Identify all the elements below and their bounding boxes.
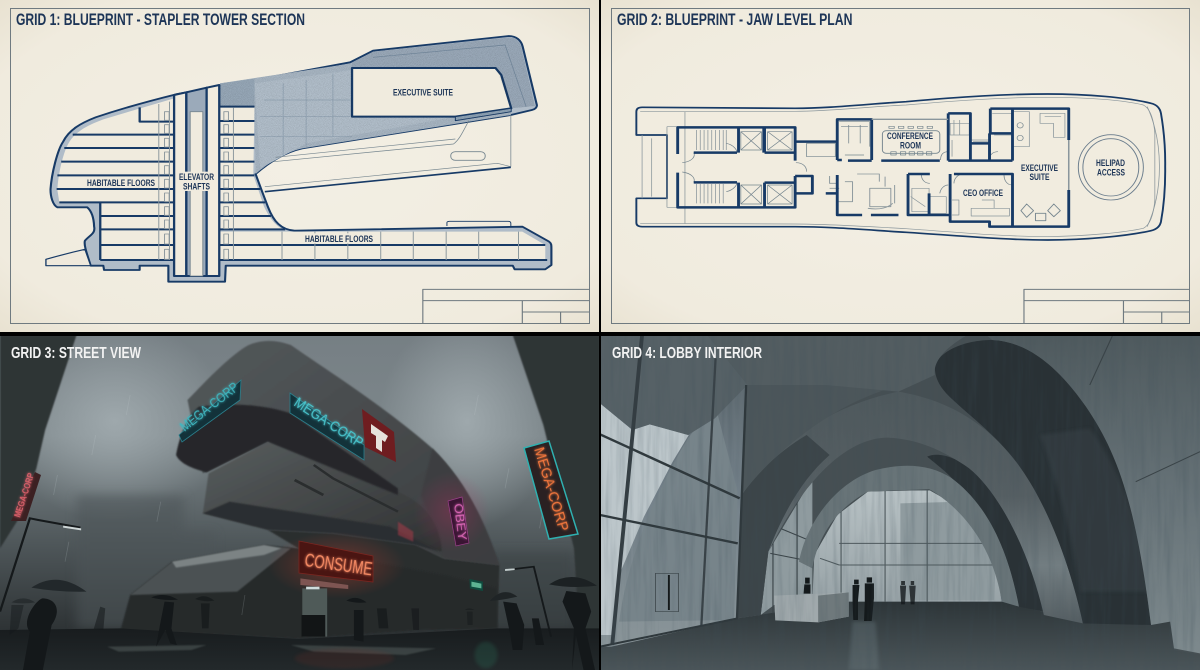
title block [423, 289, 589, 323]
sign: consume: CONSUME [303, 549, 374, 579]
lobby illustration [600, 335, 1200, 670]
mid block [203, 442, 442, 552]
heading: grid 3: GRID 3: STREET VIEW [11, 345, 142, 362]
arch b band [736, 392, 1083, 623]
label: helipad access: ACCESS [1097, 168, 1125, 178]
label: habitable floors lower: HABITABLE FLOORS [305, 234, 373, 245]
label: ceo office: CEO OFFICE [963, 188, 1003, 199]
sign: consume [299, 541, 374, 582]
side glazing [761, 478, 812, 615]
right building [512, 336, 599, 610]
heading: grid 4: GRID 4: LOBBY INTERIOR [612, 345, 762, 362]
neon haze [268, 532, 406, 598]
panel: grid 3 street view [0, 315, 600, 670]
sign: mega-corp on the corner [176, 379, 242, 442]
sign: left neon: MEGA-CORP [12, 472, 36, 519]
label: executive suite [1021, 164, 1058, 180]
executive suite room [352, 68, 511, 117]
elevators [741, 132, 792, 204]
floor [600, 602, 1200, 670]
label: conference room: ROOM [900, 140, 921, 151]
habitable floor voids [57, 98, 174, 260]
label: executive suite: EXECUTIVE SUITE [393, 88, 453, 98]
upper building mass [187, 341, 499, 565]
floor plates [57, 107, 547, 260]
heading: grid 2: GRID 2: BLUEPRINT - JAW LEVEL PLAN [617, 11, 852, 29]
ceiling [707, 335, 967, 392]
sign: red logo [362, 409, 396, 462]
label backing [185, 172, 208, 191]
concrete texture [220, 38, 534, 174]
sign: mega-corp vertical: MEGA-CORP [530, 445, 572, 533]
sign: mega-corp on the corner: MEGA-CORP [176, 379, 242, 434]
doorway [302, 588, 327, 637]
label: helipad access [1096, 160, 1125, 176]
rain streaks [54, 395, 543, 615]
stairs [696, 130, 726, 203]
jaw lines [265, 115, 511, 187]
street lamps [0, 518, 80, 612]
glass wall [600, 335, 747, 647]
arch a dark niche [935, 340, 1151, 625]
arch a front band [986, 335, 1200, 653]
label: elevator shafts: ELEVATOR [179, 172, 214, 183]
arch b shaded pillar [736, 435, 830, 618]
sign: obey: OBEY [451, 503, 469, 541]
sign: mega-corp facade: MEGA-CORP [291, 394, 366, 451]
street scene illustration [0, 315, 600, 670]
sign: obey [448, 497, 469, 546]
heading: grid 1: GRID 1: BLUEPRINT - STAPLER TOWER SECTION [16, 11, 305, 29]
label: elevator shafts [179, 174, 214, 190]
pedestrians with umbrellas [10, 577, 597, 670]
label: habitable floors upper: HABITABLE FLOORS [87, 178, 155, 189]
overhang shadow [176, 405, 398, 495]
distant towers in fog [76, 493, 181, 628]
elevator shafts [174, 92, 186, 276]
title block [1024, 289, 1189, 323]
back wall above arch [743, 385, 902, 492]
people silhouettes [804, 577, 916, 621]
green sign [470, 579, 483, 591]
hull outline [636, 94, 1165, 240]
outer shell [51, 36, 551, 282]
thick walls [678, 109, 1069, 227]
label: executive suite: SUITE [1030, 172, 1050, 183]
ground [0, 628, 600, 670]
shopfront lower building [121, 545, 497, 638]
panel: grid 1 stapler tower section blueprint [0, 0, 599, 332]
panel: grid 4 lobby interior [600, 335, 1200, 670]
far window [812, 490, 1002, 602]
concrete texture overlay [601, 336, 1200, 670]
label: helipad access: HELIPAD [1096, 158, 1125, 169]
doors and furniture [682, 143, 1012, 193]
top cap [352, 37, 535, 108]
mullions [612, 335, 642, 645]
label: conference room [887, 132, 933, 148]
panel: grid 2 jaw level plan blueprint [601, 0, 1200, 332]
concrete core [220, 63, 511, 174]
glass door [655, 573, 678, 612]
arch c band [799, 466, 1019, 607]
service strips [159, 102, 518, 260]
label: executive suite: EXECUTIVE [1021, 163, 1058, 174]
left building [0, 335, 77, 548]
underside mass linking block and shop [268, 530, 499, 628]
helipad rings [1078, 135, 1143, 200]
label: conference room: CONFERENCE [887, 131, 933, 142]
front foot [46, 249, 91, 266]
reception desk [774, 592, 849, 622]
glazed sections [872, 119, 1069, 190]
floor plan drawing [636, 94, 1189, 323]
section drawing: stapler tower [46, 33, 589, 323]
label: elevator shafts: SHAFTS [183, 182, 210, 192]
arch c dark niche [927, 455, 1044, 612]
